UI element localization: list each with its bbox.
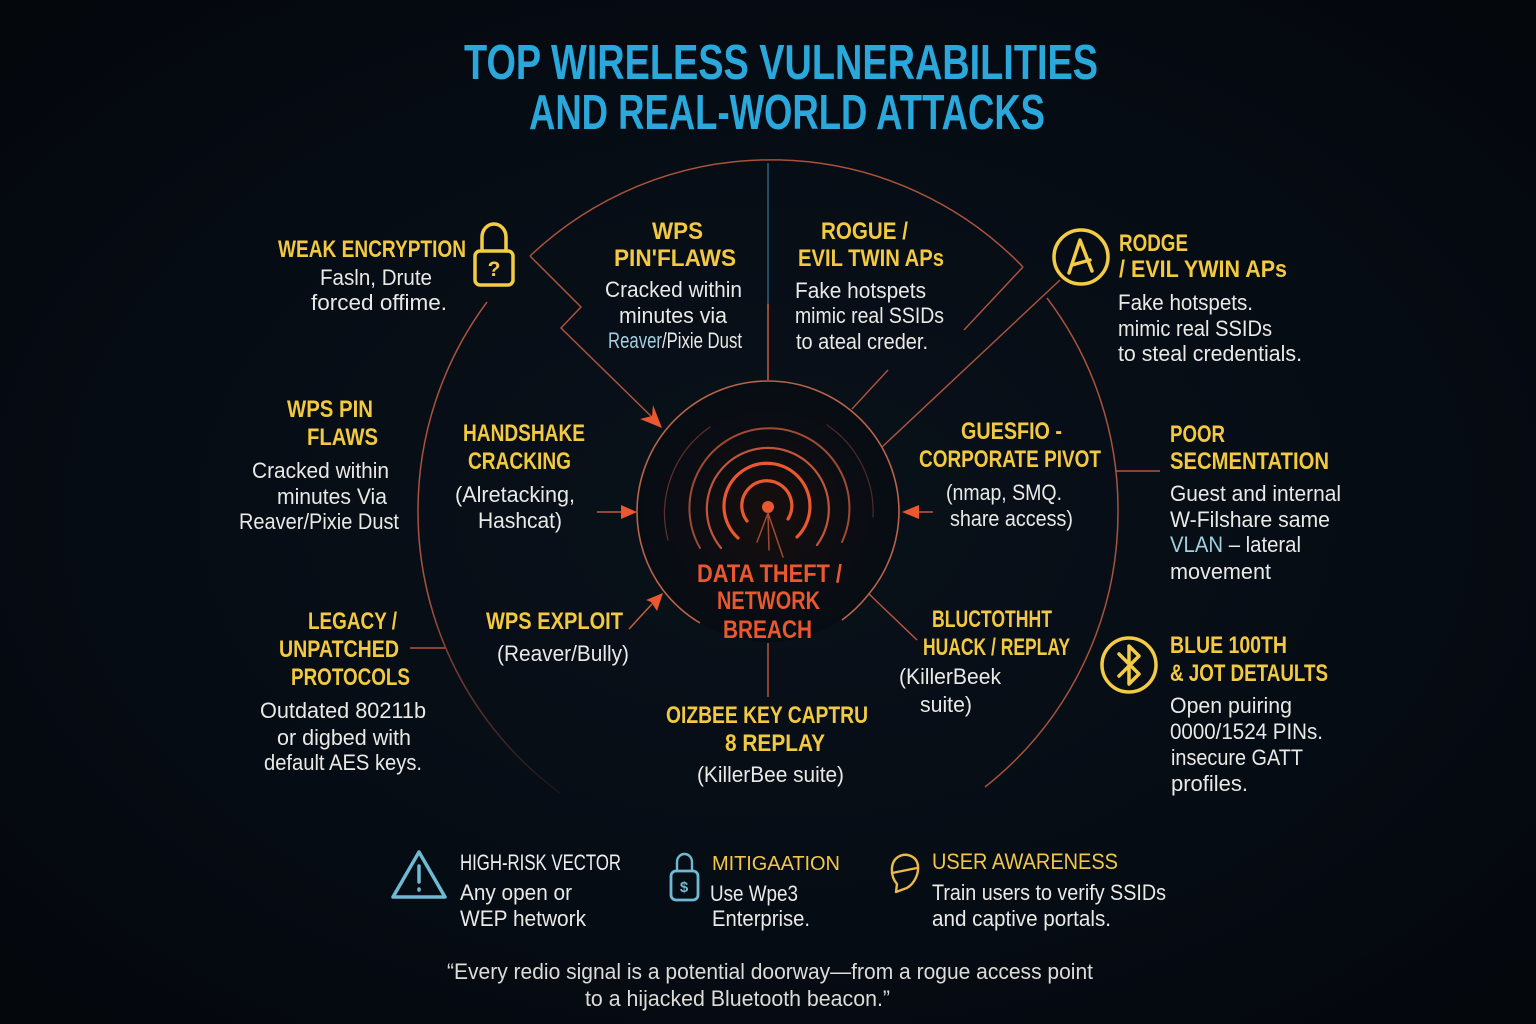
title bbox=[464, 36, 1098, 140]
radial diagram lines bbox=[410, 160, 1160, 793]
legend: mitigation: Enterprise. bbox=[712, 906, 810, 931]
panel: WPS pin flaws left bbox=[239, 396, 399, 534]
panel: inner rogue evil twin: Fake hotspets bbox=[795, 278, 926, 303]
panel: handshake cracking bbox=[455, 420, 585, 533]
panel: handshake cracking: CRACKING bbox=[468, 448, 571, 475]
legend: user awareness: and captive portals. bbox=[932, 906, 1111, 931]
quote: “Every redio signal is a potential doorway—from a rogue access point bbox=[447, 959, 1093, 984]
icon: blue padlock bbox=[671, 854, 698, 900]
panel: poor segmentation: POOR bbox=[1170, 421, 1225, 448]
center hub bbox=[637, 381, 899, 644]
panel: poor segmentation bbox=[1170, 421, 1341, 584]
panel: guest to corporate pivot: CORPORATE PIVOT bbox=[919, 446, 1101, 473]
center label: data theft: DATA THEFT / bbox=[697, 560, 842, 588]
icon: user head bbox=[892, 855, 918, 892]
panel: rodge evil ywin: Fake hotspets. bbox=[1118, 290, 1253, 315]
legend: user awareness: Train users to verify SSIDs bbox=[932, 880, 1166, 905]
panel: inner WPS pin flaws: Cracked within bbox=[605, 277, 742, 302]
center label: data theft bbox=[697, 560, 842, 644]
icon: circled A bbox=[1054, 230, 1108, 284]
panel: guest to corporate pivot: share access) bbox=[950, 506, 1073, 531]
panel: inner rogue evil twin: to ateal creder. bbox=[796, 329, 928, 354]
panel: WPS pin flaws left: Reaver/Pixie Dust bbox=[239, 509, 399, 534]
panel: legacy unpatched protocols: Outdated 80211b bbox=[260, 698, 426, 723]
panel: zigbee key capture: 8 REPLAY bbox=[725, 730, 825, 757]
panel: poor segmentation: movement bbox=[1170, 559, 1271, 584]
panel: bluetooth and IoT defaults: & JOT DETAULTS bbox=[1170, 660, 1328, 687]
title: TOP WIRELESS VULNERABILITIES bbox=[464, 36, 1098, 90]
panel: weak encryption: WEAK ENCRYPTION bbox=[278, 236, 466, 263]
arrow: WPS exploit to center bbox=[629, 593, 663, 629]
panel: weak encryption: forced offime. bbox=[311, 290, 447, 315]
panel: legacy unpatched protocols: LEGACY / bbox=[308, 608, 397, 635]
icon: warning triangle bbox=[393, 852, 445, 897]
panel: WPS pin flaws left: WPS PIN bbox=[287, 396, 373, 423]
legend: mitigation: Use Wpe3 bbox=[710, 881, 798, 906]
icon: blue padlock: $ bbox=[680, 879, 689, 896]
legend: user awareness bbox=[932, 849, 1166, 931]
panel: bluetooth hijack: suite) bbox=[920, 692, 972, 717]
panel: inner rogue evil twin: ROGUE / bbox=[821, 218, 908, 245]
panel: legacy unpatched protocols: default AES keys. bbox=[264, 750, 422, 775]
panel: rodge evil ywin: mimic real SSIDs bbox=[1118, 316, 1272, 341]
legend: mitigation bbox=[710, 853, 840, 931]
panel: poor segmentation: SECMENTATION bbox=[1170, 448, 1329, 475]
panel: inner WPS pin flaws: Reaver/Pixie Dust bbox=[608, 328, 742, 353]
legend: high-risk vector: Any open or bbox=[460, 880, 572, 905]
panel: guest to corporate pivot bbox=[919, 418, 1101, 531]
legend: mitigation: MITIGAATION bbox=[712, 853, 840, 875]
panel: legacy unpatched protocols: UNPATCHED bbox=[279, 636, 399, 663]
panel: bluetooth hijack bbox=[899, 606, 1070, 717]
panel: WPS exploit: (Reaver/Bully) bbox=[497, 641, 629, 666]
panel: rodge evil ywin bbox=[1118, 230, 1302, 366]
center label: data theft: NETWORK bbox=[717, 587, 820, 615]
panel: zigbee key capture: (KillerBee suite) bbox=[697, 762, 844, 787]
panel: zigbee key capture: OIZBEE KEY CAPTRU bbox=[666, 702, 868, 729]
panel: legacy unpatched protocols bbox=[260, 608, 426, 775]
panel: rodge evil ywin: / EVIL YWIN APs bbox=[1119, 256, 1287, 283]
panel: inner WPS pin flaws: WPS bbox=[652, 218, 703, 245]
title: AND REAL-WORLD ATTACKS bbox=[529, 86, 1045, 140]
panel: inner WPS pin flaws: minutes via bbox=[619, 303, 728, 328]
icon: radio signal bbox=[665, 425, 873, 557]
panel: bluetooth and IoT defaults: profiles. bbox=[1171, 771, 1248, 796]
panel: WPS pin flaws left: Cracked within bbox=[252, 458, 389, 483]
panel: legacy unpatched protocols: or digbed with bbox=[277, 725, 411, 750]
panel: bluetooth hijack: HUACK / REPLAY bbox=[923, 634, 1070, 661]
panel: bluetooth and IoT defaults: 0000/1524 PINs. bbox=[1170, 719, 1323, 744]
legend: high-risk vector bbox=[460, 850, 621, 931]
panel: guest to corporate pivot: GUESFIO - bbox=[961, 418, 1062, 445]
panel: inner rogue evil twin: mimic real SSIDs bbox=[795, 303, 944, 328]
panel: bluetooth and IoT defaults: Open puiring bbox=[1170, 693, 1292, 718]
arrow: handshake to center bbox=[597, 505, 637, 519]
panel: bluetooth and IoT defaults: BLUE 100TH bbox=[1170, 632, 1287, 659]
panel: weak encryption bbox=[278, 236, 466, 315]
panel: poor segmentation: W-Filshare same bbox=[1170, 507, 1330, 532]
panel: inner WPS pin flaws bbox=[605, 218, 742, 353]
legend: user awareness: USER AWARENESS bbox=[932, 849, 1118, 874]
panel: bluetooth hijack: (KillerBeek bbox=[899, 664, 1002, 689]
icon: bluetooth bbox=[1102, 638, 1156, 692]
panel: bluetooth hijack: BLUCTOTHHT bbox=[932, 606, 1052, 633]
icon: padlock with question mark bbox=[475, 224, 513, 285]
icon: padlock with question mark: ? bbox=[488, 258, 500, 281]
arrow: WPS flaws to center bbox=[640, 405, 662, 428]
arrow: guest pivot to center bbox=[902, 505, 933, 519]
panel: handshake cracking: Hashcat) bbox=[478, 508, 562, 533]
center label: data theft: BREACH bbox=[723, 616, 812, 644]
panel: weak encryption: Fasln, Drute bbox=[320, 265, 432, 290]
panel: handshake cracking: (Alretacking, bbox=[455, 482, 575, 507]
panel: rodge evil ywin: to steal credentials. bbox=[1118, 341, 1302, 366]
panel: rodge evil ywin: RODGE bbox=[1119, 230, 1188, 257]
panel: WPS pin flaws left: FLAWS bbox=[307, 424, 378, 451]
panel: poor segmentation: VLAN – lateral bbox=[1170, 532, 1301, 557]
quote: to a hijacked Bluetooth beacon.” bbox=[585, 986, 890, 1011]
panel: inner WPS pin flaws: PIN'FLAWS bbox=[614, 245, 736, 272]
panel: poor segmentation: Guest and internal bbox=[1170, 481, 1341, 506]
panel: WPS exploit bbox=[486, 608, 629, 666]
panel: WPS exploit: WPS EXPLOIT bbox=[486, 608, 623, 635]
panel: bluetooth and IoT defaults bbox=[1170, 632, 1328, 796]
panel: handshake cracking: HANDSHAKE bbox=[463, 420, 585, 447]
quote bbox=[447, 959, 1093, 1011]
panel: inner rogue evil twin bbox=[795, 218, 944, 354]
legend: high-risk vector: HIGH-RISK VECTOR bbox=[460, 850, 621, 875]
panel: zigbee key capture bbox=[666, 702, 868, 787]
panel: legacy unpatched protocols: PROTOCOLS bbox=[291, 664, 410, 691]
panel: bluetooth and IoT defaults: insecure GATT bbox=[1171, 745, 1303, 770]
panel: inner rogue evil twin: EVIL TWIN APs bbox=[798, 245, 944, 272]
panel: WPS pin flaws left: minutes Via bbox=[277, 484, 388, 509]
panel: guest to corporate pivot: (nmap, SMQ. bbox=[946, 480, 1062, 505]
legend: high-risk vector: WEP hetwork bbox=[460, 906, 587, 931]
